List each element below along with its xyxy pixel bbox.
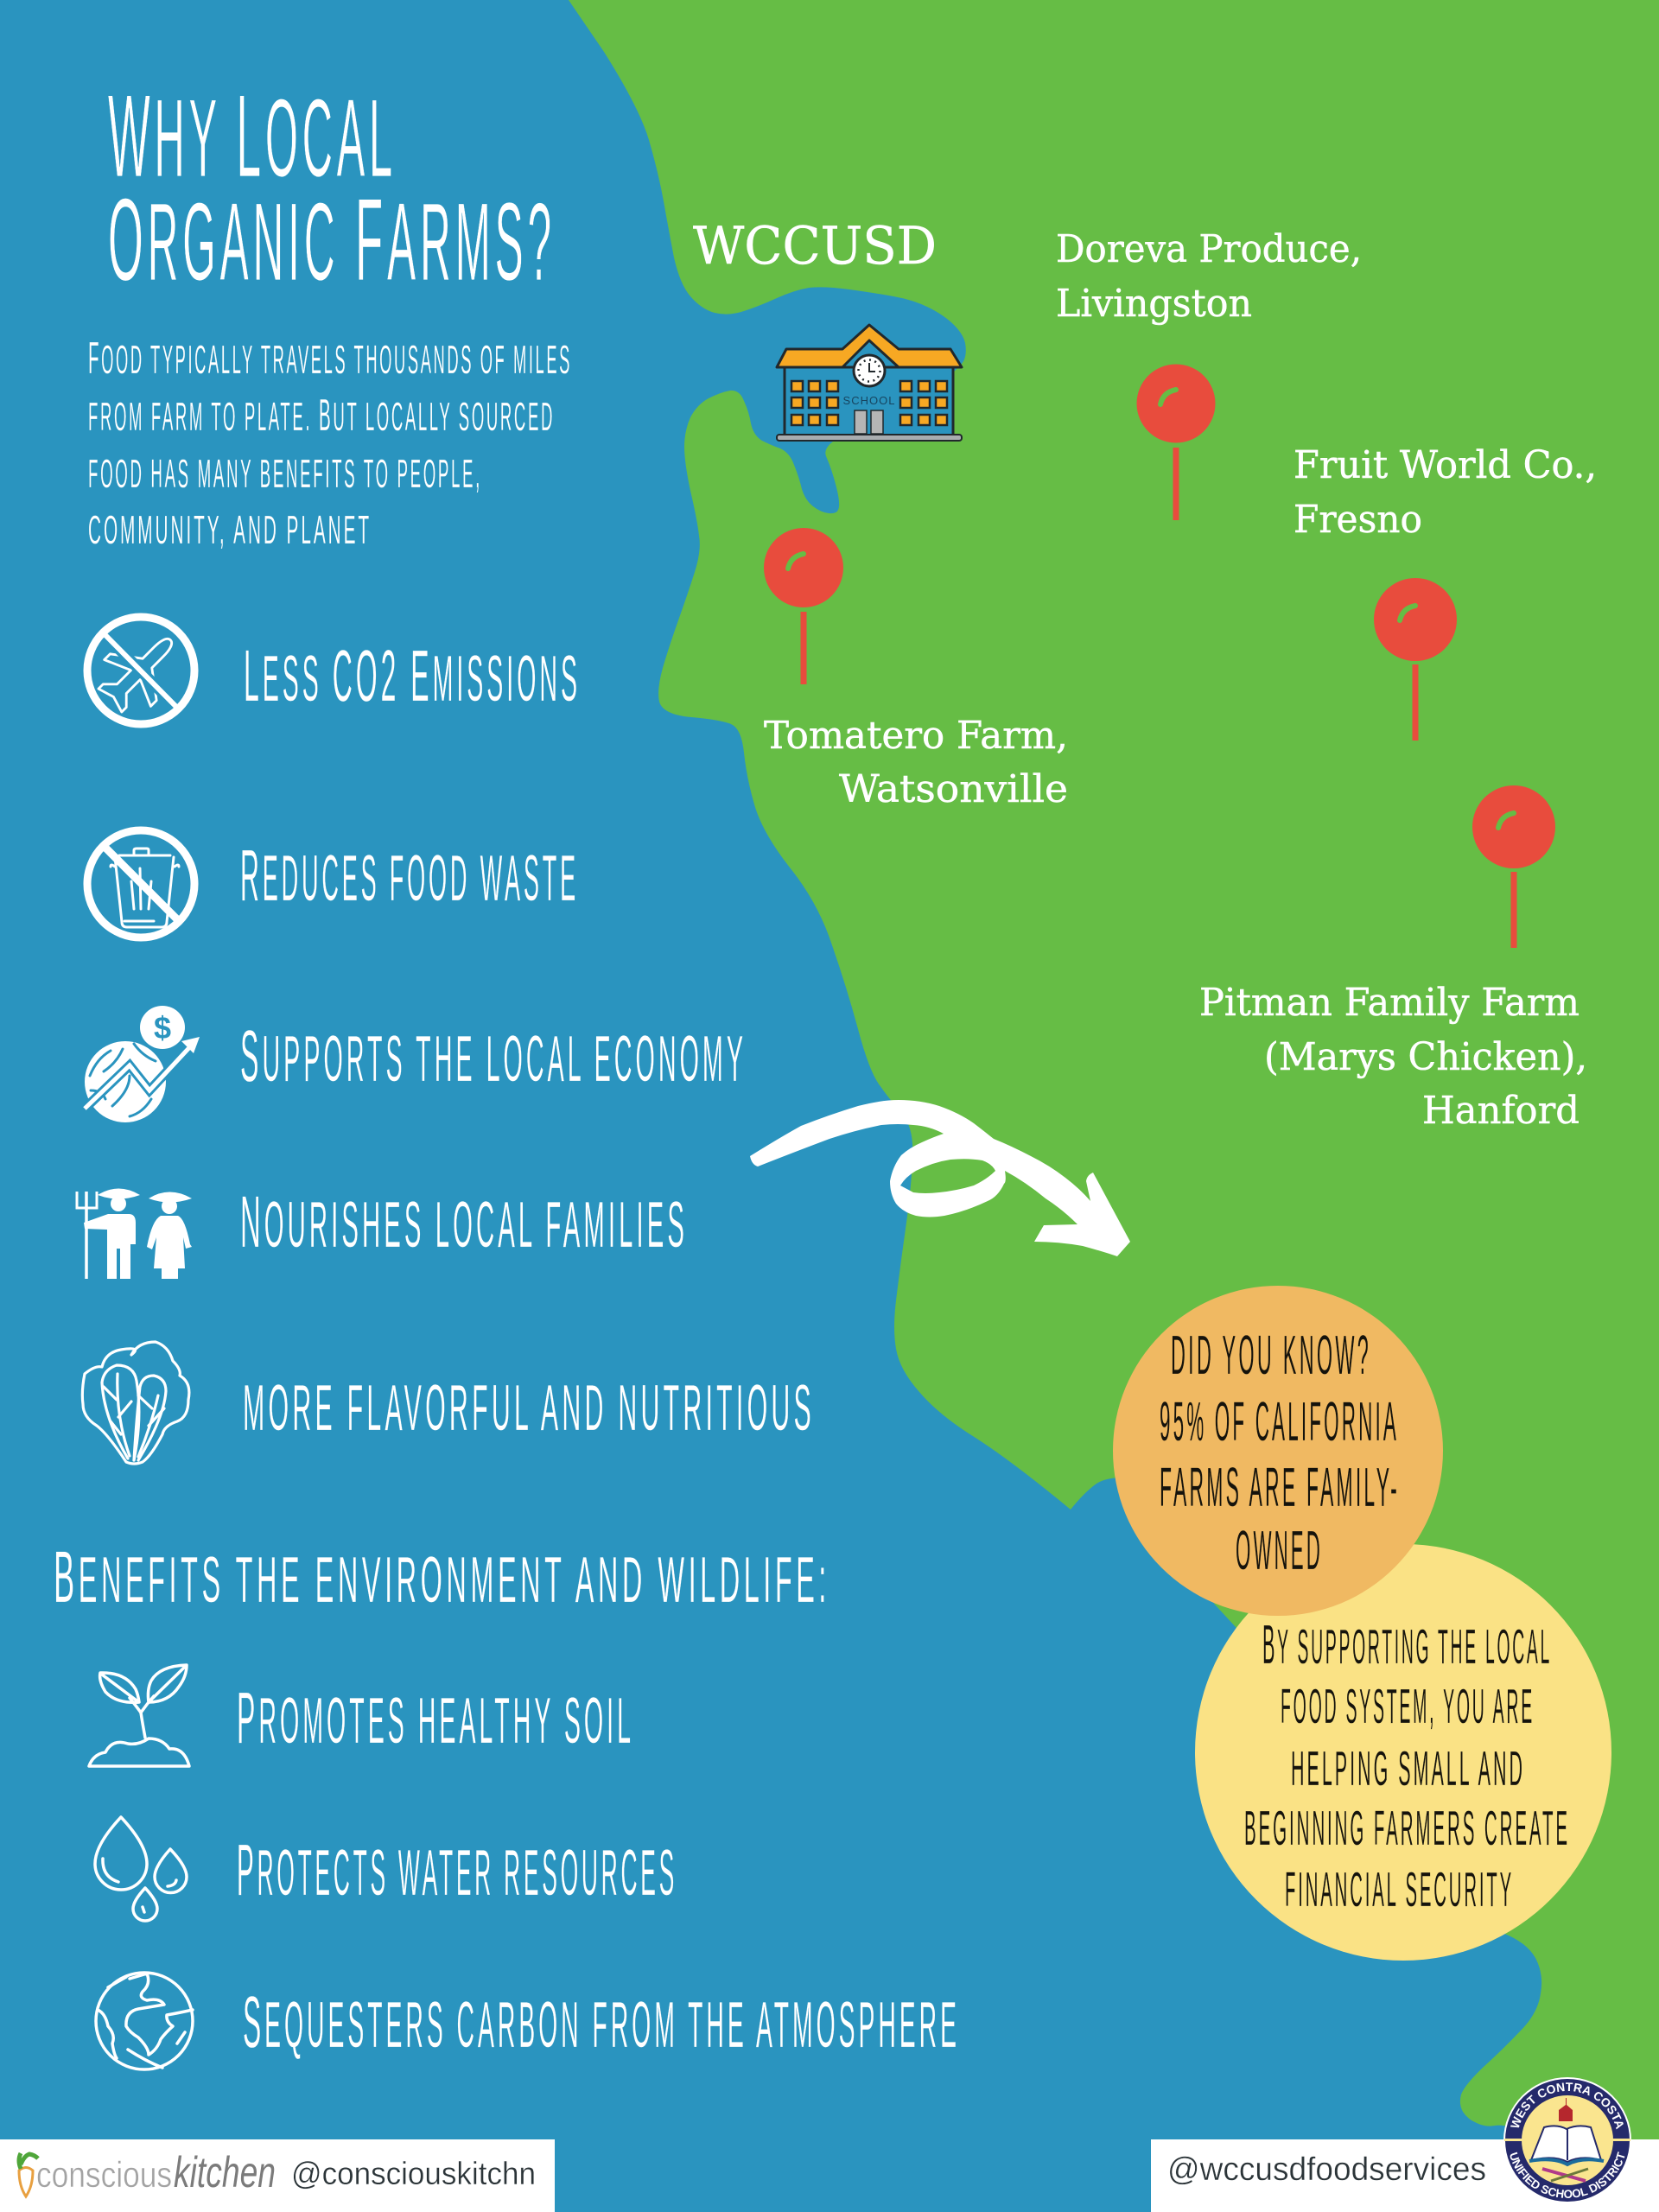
label: Fruit World: Fruit World Co., bbox=[1294, 443, 1597, 487]
label: Fruit World bbox=[1294, 443, 1597, 542]
benefit: less CO2 emissions: LESS CO2 EMISSIONS bbox=[244, 635, 581, 716]
label: Doreva Produce: Doreva Produce, bbox=[1056, 227, 1362, 271]
label: Fruit World: Fresno bbox=[1294, 498, 1422, 542]
logo: West Contra Costa Unified School District seal: WEST CONTRA COSTA bbox=[1510, 2082, 1624, 2129]
label: WCCUSD: WCCUSD bbox=[693, 216, 937, 276]
icon: school building: SCHOOL bbox=[843, 394, 895, 407]
label: Tomatero Farm bbox=[764, 714, 1068, 811]
icon: globe with rising arrow and dollar coin: $ bbox=[154, 1010, 171, 1046]
footer: Conscious Kitchen strip: @consciouskitchn bbox=[291, 2156, 536, 2191]
intro paragraph: COMMUNITY, AND PLANET bbox=[88, 507, 372, 552]
icon: globe with rising arrow and dollar coin bbox=[85, 1006, 200, 1122]
map: green California landmass bbox=[569, 0, 1659, 2139]
label: Pitman Family Farm: (Marys Chicken), bbox=[1264, 1035, 1587, 1079]
footer: Conscious Kitchen strip bbox=[0, 2139, 555, 2212]
text: REDUCES FOOD WASTE bbox=[240, 835, 579, 916]
icon: water drops bbox=[95, 1817, 187, 1921]
icon: lettuce bbox=[82, 1342, 189, 1464]
label: Pitman Family Farm: Pitman Family Farm bbox=[1199, 981, 1580, 1025]
callout: orange circle bbox=[1113, 1286, 1443, 1616]
label: Tomatero Farm: Watsonville bbox=[839, 767, 1068, 811]
footer: WCCUSD strip: @wccusdfoodservices bbox=[1167, 2152, 1486, 2188]
logo: West Contra Costa Unified School District seal: UNIFIED SCHOOL DISTRICT bbox=[1510, 2152, 1624, 2198]
callout: orange circle: OWNED bbox=[1236, 1519, 1323, 1581]
label: Doreva Produce: Livingston bbox=[1056, 282, 1252, 326]
pin: Doreva bbox=[1137, 365, 1215, 520]
text: SUPPORTS THE LOCAL ECONOMY bbox=[240, 1015, 747, 1096]
title: WHY LOCAL bbox=[108, 70, 397, 201]
text: MORE FLAVORFUL AND NUTRITIOUS bbox=[243, 1371, 815, 1444]
intro paragraph: FOOD HAS MANY BENEFITS TO PEOPLE, bbox=[88, 451, 482, 496]
icon: earth globe bbox=[96, 1973, 193, 2069]
title: ORGANIC FARMS? bbox=[108, 174, 556, 305]
pin: Fruit World bbox=[1374, 578, 1457, 741]
label: Doreva Produce bbox=[1056, 227, 1362, 326]
label: Pitman Family Farm bbox=[1199, 981, 1587, 1133]
logo: West Contra Costa Unified School District seal bbox=[1503, 2077, 1631, 2202]
icon: school building bbox=[777, 325, 962, 441]
text: FOOD TYPICALLY TRAVELS THOUSANDS OF MILES bbox=[88, 333, 572, 383]
footer: Conscious Kitchen strip: kitchen bbox=[174, 2148, 276, 2196]
label: Pitman Family Farm: Hanford bbox=[1422, 1089, 1580, 1133]
callout: yellow circle bbox=[1195, 1544, 1611, 1961]
footer: Conscious Kitchen strip: conscious bbox=[36, 2154, 172, 2195]
text: PROTECTS WATER RESOURCES bbox=[237, 1829, 677, 1910]
label: Tomatero Farm: Tomatero Farm, bbox=[764, 714, 1068, 758]
title bbox=[108, 70, 556, 305]
pin: Pitman bbox=[1472, 785, 1555, 948]
pin: Tomatero bbox=[764, 528, 843, 684]
intro paragraph: FROM FARM TO PLATE. BUT LOCALLY SOURCED bbox=[88, 390, 555, 440]
icon: no trash can bbox=[87, 830, 194, 938]
text: NOURISHES LOCAL FAMILIES bbox=[240, 1181, 688, 1262]
arrow: curly arrow to callouts bbox=[750, 1100, 1130, 1256]
icon: sprout bbox=[89, 1665, 189, 1766]
icon: no airplane bbox=[87, 617, 194, 724]
footer: WCCUSD strip bbox=[1151, 2139, 1659, 2212]
text: PROMOTES HEALTHY SOIL bbox=[237, 1677, 634, 1758]
intro paragraph bbox=[88, 333, 572, 552]
icon: farmer couple bbox=[77, 1189, 192, 1279]
